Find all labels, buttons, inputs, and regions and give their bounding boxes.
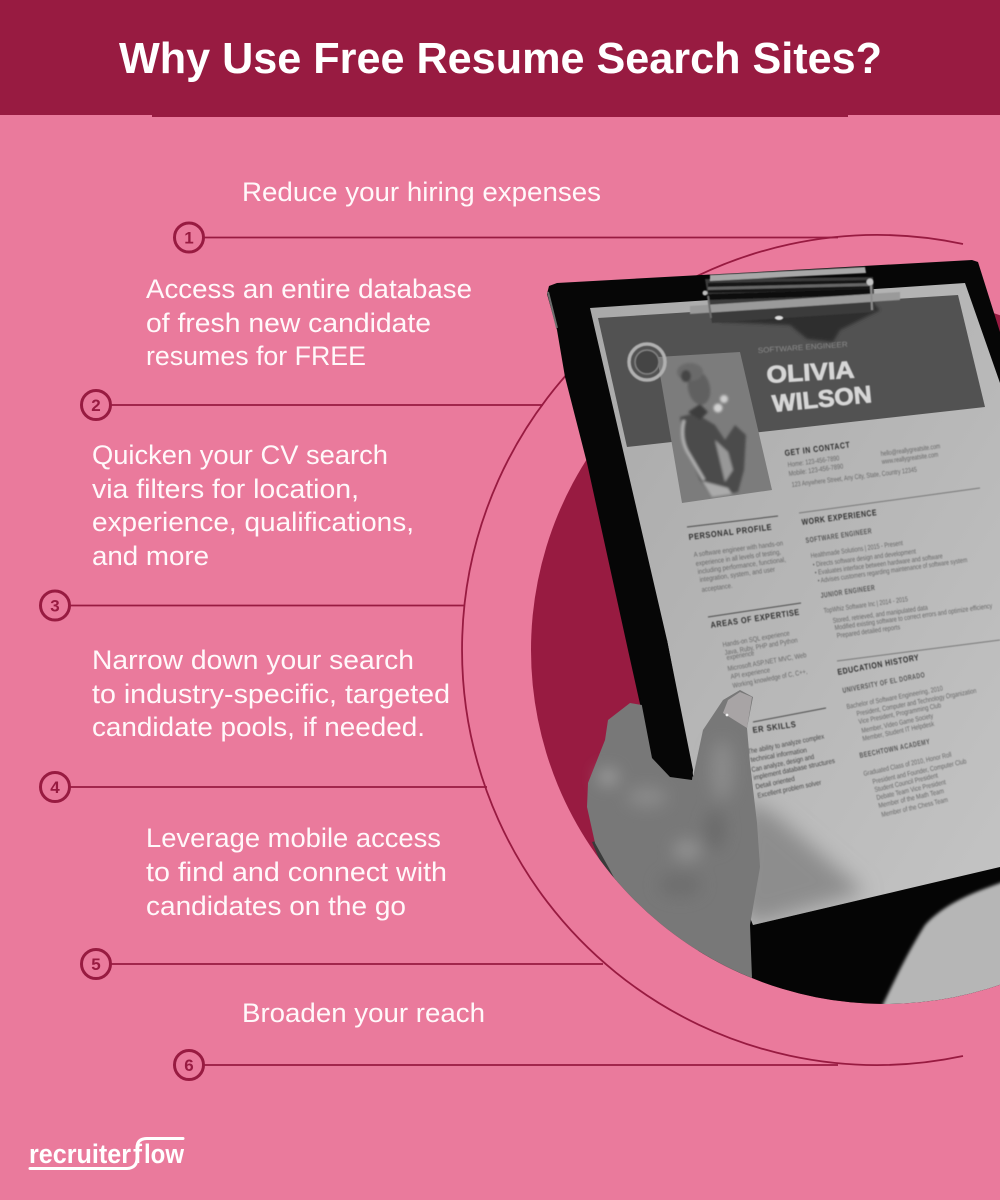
hand bbox=[587, 690, 760, 1005]
resume text: ER SKILLS bbox=[752, 719, 797, 735]
resume text: Mobile: 123-456-7890 bbox=[788, 463, 844, 478]
text: item 2: resumes for FREE bbox=[146, 341, 366, 371]
resume text: Prepared detailed reports bbox=[836, 624, 901, 640]
resume text: Hands-on SQL experience bbox=[722, 630, 790, 649]
clip shadow bbox=[720, 300, 880, 342]
resume text: Vice President, Programming Club bbox=[858, 702, 942, 726]
resume text: Healthmade Solutions | 2015 - Present bbox=[810, 540, 903, 560]
resume text bbox=[688, 340, 993, 819]
resume text: TopWhiz Software Inc | 2014 - 2015 bbox=[823, 596, 909, 615]
number badge 6 bbox=[174, 1050, 204, 1080]
number badge 6: 6 bbox=[184, 1056, 194, 1075]
resume text: GET IN CONTACT bbox=[784, 439, 851, 458]
text: item 3 bbox=[92, 440, 414, 571]
item 3 bbox=[40, 440, 465, 620]
number badge 1 bbox=[174, 223, 204, 252]
text: item 6: Broaden your reach bbox=[242, 998, 485, 1028]
text: item 5: candidates on the go bbox=[146, 891, 406, 921]
lap bbox=[880, 880, 1000, 1004]
photo: clipboard with resume held by hand bbox=[547, 260, 1000, 1020]
connector 4 bbox=[70, 786, 487, 788]
metal clip bbox=[690, 267, 900, 323]
number badge 3 bbox=[40, 591, 70, 620]
logo: recruiterflow: low bbox=[144, 1139, 185, 1169]
number badge 5: 5 bbox=[91, 955, 101, 974]
text: item 5: to find and connect with bbox=[146, 857, 447, 887]
text: item 3: via filters for location, bbox=[92, 474, 359, 504]
resume text: WILSON bbox=[771, 381, 873, 418]
resume text: Member of the Chess Team bbox=[881, 797, 949, 819]
connector 3 bbox=[70, 604, 465, 606]
resume text: UNIVERSITY OF EL DORADO bbox=[842, 670, 926, 695]
number badge 5 bbox=[82, 950, 110, 978]
item 4 bbox=[40, 645, 487, 802]
resume text: BEECHTOWN ACADEMY bbox=[859, 737, 931, 760]
header band bbox=[0, 0, 1000, 117]
resume text: EDUCATION HISTORY bbox=[837, 652, 920, 677]
resume text: • Evaluates interface between hardware and software bbox=[814, 553, 943, 577]
dark circle behind photo bbox=[531, 296, 1000, 1004]
resume paper bbox=[590, 283, 1000, 925]
text: item 1: Reduce your hiring expenses bbox=[242, 177, 601, 207]
lower scene clipped to circle bbox=[698, 867, 1000, 1004]
number badge 1: 1 bbox=[184, 228, 194, 248]
resume text: The ability to analyze complex bbox=[747, 733, 825, 756]
resume text: Bachelor of Software Engineering, 2010 bbox=[846, 685, 944, 711]
number badge 4 bbox=[40, 772, 70, 802]
resume text: Member, Student IT Helpdesk bbox=[862, 721, 935, 743]
resume text: implement database structures bbox=[753, 758, 836, 782]
text: item 5 bbox=[146, 823, 447, 921]
resume text: Working knowledge of C, C++, bbox=[732, 669, 808, 690]
resume text: OLIVIA bbox=[766, 357, 855, 389]
resume text: technical information bbox=[750, 747, 808, 764]
resume text: SOFTWARE ENGINEER bbox=[805, 526, 873, 545]
text: item 3: experience, qualifications, bbox=[92, 507, 414, 537]
number badge 2 bbox=[82, 390, 110, 420]
clipboard bevel bbox=[548, 292, 557, 328]
text: item 4: to industry-specific, targeted bbox=[92, 679, 450, 709]
thin outline arc bbox=[462, 235, 963, 1065]
number badge 4: 4 bbox=[50, 778, 60, 797]
resume header band bbox=[598, 295, 985, 447]
resume text: integration, system, and user bbox=[699, 566, 776, 584]
text: item 3: Quicken your CV search bbox=[92, 440, 388, 470]
resume logo seal bbox=[629, 344, 665, 380]
resume text: Student Council President bbox=[874, 772, 939, 794]
logo: recruiterflow: recruiter bbox=[29, 1139, 131, 1169]
connector 1 bbox=[204, 236, 838, 238]
resume divider lines bbox=[687, 488, 1000, 722]
resume text: Member of the Math Team bbox=[878, 788, 945, 810]
item 2 bbox=[82, 274, 543, 420]
clipboard lower black area bbox=[698, 867, 1000, 1004]
resume photo bbox=[657, 352, 772, 503]
resume text: experience bbox=[726, 650, 755, 662]
text: item 4: Narrow down your search bbox=[92, 645, 414, 675]
resume text: Home: 123-456-7890 bbox=[787, 455, 840, 469]
resume portrait bbox=[677, 363, 746, 497]
resume text: A software engineer with hands-on bbox=[693, 540, 784, 559]
resume text: Excellent problem solver bbox=[757, 779, 823, 800]
resume text: SOFTWARE ENGINEER bbox=[758, 340, 849, 355]
resume text: experience in all levels of testing, bbox=[695, 549, 781, 568]
text: item 2: of fresh new candidate bbox=[146, 308, 431, 338]
number badge 3: 3 bbox=[50, 596, 60, 616]
item 1 bbox=[174, 177, 838, 252]
clipboard board bbox=[547, 260, 1000, 782]
connector 5 bbox=[111, 963, 603, 965]
resume text: Debate Team Vice President bbox=[876, 779, 947, 802]
resume text: JUNIOR ENGINEER bbox=[820, 583, 876, 600]
text: item 2 bbox=[146, 274, 472, 371]
resume text: Can analyze, design and bbox=[751, 754, 815, 774]
resume text: • Directs software design and development bbox=[812, 548, 916, 569]
text: item 3: and more bbox=[92, 541, 209, 571]
text: item 2: Access an entire database bbox=[146, 274, 472, 304]
resume text: Member, Video Game Society bbox=[861, 713, 934, 735]
resume text: AREAS OF EXPERTISE bbox=[710, 607, 800, 630]
number badge 2: 2 bbox=[91, 396, 101, 415]
item 6 bbox=[174, 998, 838, 1080]
item 5 bbox=[82, 823, 603, 978]
thumbnail bbox=[723, 692, 752, 728]
resume text: www.reallygreatsite.com bbox=[881, 452, 939, 466]
resume text: Detail oriented bbox=[755, 776, 796, 791]
hand shading bbox=[598, 740, 734, 897]
resume text: Microsoft ASP.NET MVC, Web bbox=[727, 652, 807, 673]
resume text: Graduated Class of 2010, Honor Roll bbox=[863, 752, 953, 778]
text: item 4 bbox=[92, 645, 450, 742]
text: item 4: candidate pools, if needed. bbox=[92, 712, 425, 742]
resume text: hello@reallygreatsite.com bbox=[880, 443, 941, 458]
connector 6 bbox=[204, 1064, 838, 1066]
resume text: WORK EXPERIENCE bbox=[801, 507, 878, 527]
title: Why Use Free Resume Search Sites? bbox=[119, 35, 882, 83]
clipboard edge over hand bbox=[642, 640, 693, 780]
resume text: acceptance. bbox=[701, 583, 733, 594]
logo: recruiterflow bbox=[29, 1138, 185, 1169]
text: item 5: Leverage mobile access bbox=[146, 823, 441, 853]
resume text: 123 Anywhere Street, Any City, State, Country 12345 bbox=[791, 467, 917, 489]
connector 2 bbox=[111, 404, 543, 406]
logo: recruiterflow: f bbox=[133, 1139, 143, 1169]
hand and wrist clipped to circle bbox=[587, 640, 865, 1005]
hand shadow on paper bbox=[751, 798, 865, 924]
resume text: Java, Ruby, PHP and Python bbox=[724, 637, 798, 657]
resume text: API experience bbox=[730, 667, 771, 681]
resume text: President and Founder, Computer Club bbox=[872, 758, 967, 786]
resume text: Stored, retrieved, and manipulated data bbox=[832, 605, 928, 625]
resume text: PERSONAL PROFILE bbox=[688, 522, 773, 542]
resume text: including performance, functional, bbox=[697, 557, 786, 576]
dark finger edge bbox=[592, 841, 616, 880]
